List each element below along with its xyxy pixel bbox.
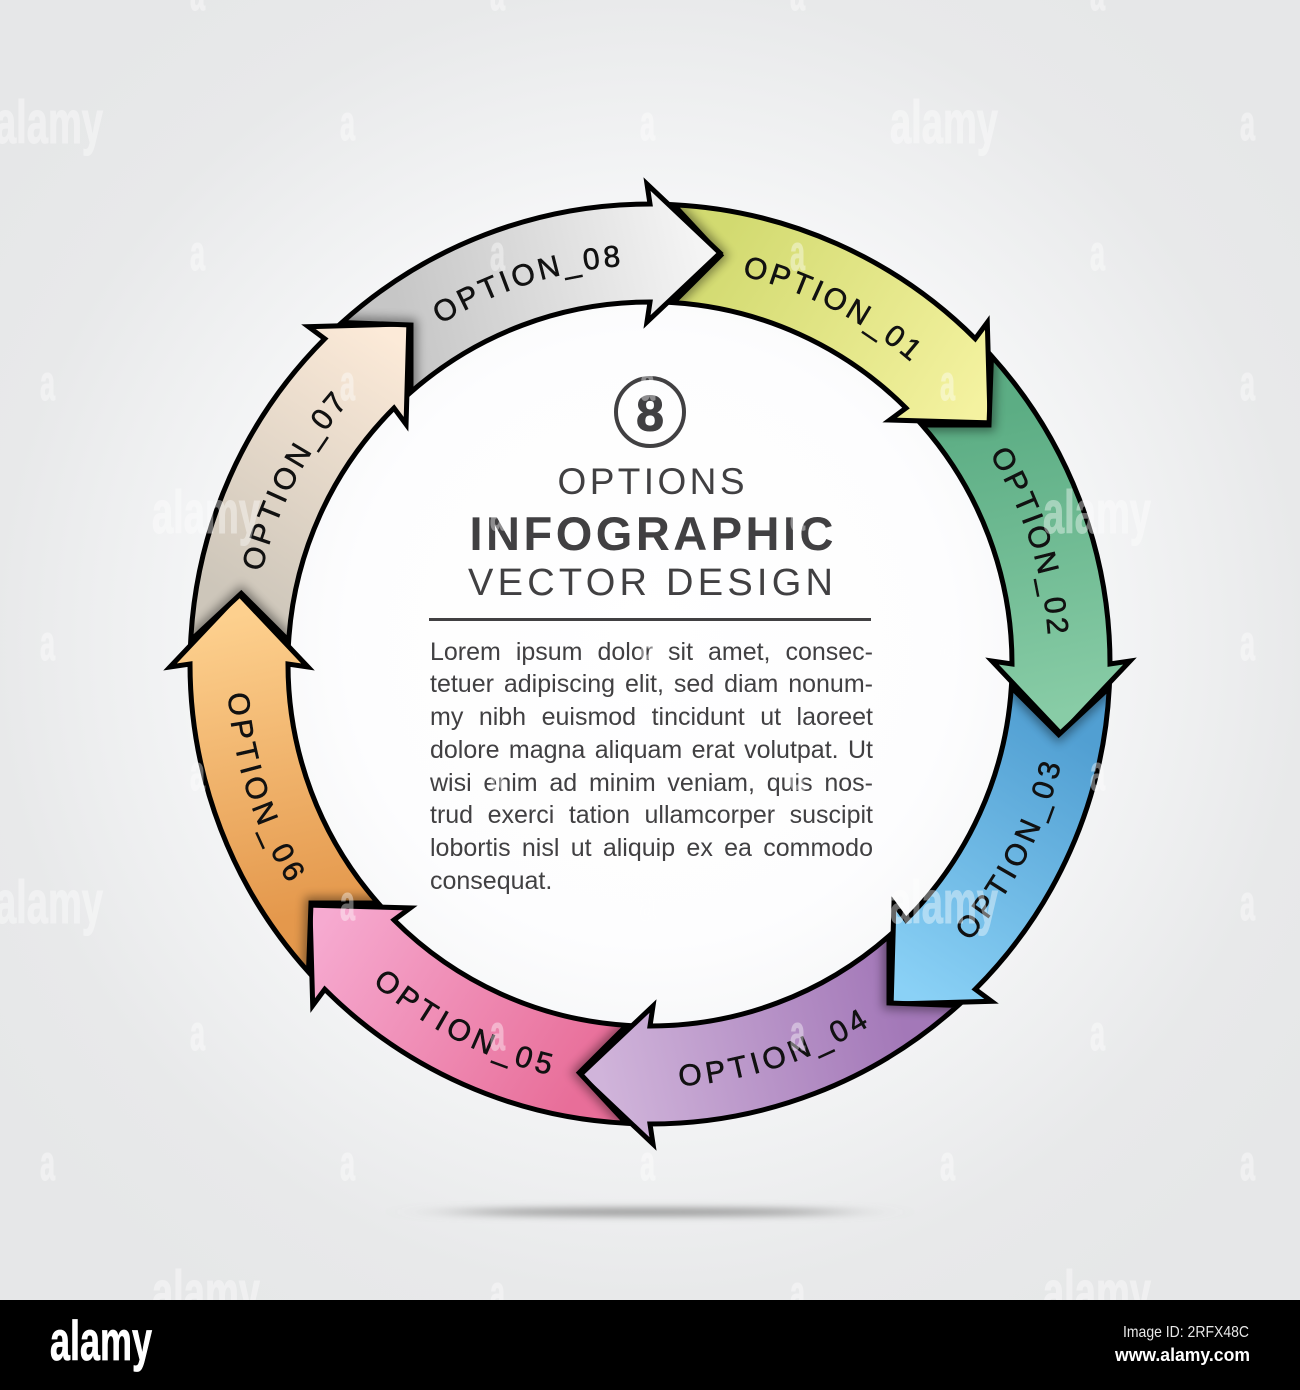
watermark overlay: a [1090,745,1106,801]
watermark overlay: a [640,1135,656,1191]
label: option 01: OPTION_01 [745,258,920,362]
watermark overlay: a [40,615,56,671]
body paragraph: my nibh euismod tincidunt ut laoreet [430,703,873,731]
watermark overlay: a [490,485,506,541]
watermark overlay: a [190,745,206,801]
label: option 04: OPTION_04 [679,1009,867,1086]
watermark overlay: a [940,615,956,671]
arrow: option 05 [309,904,632,1126]
watermark overlay: a [190,1005,206,1061]
body paragraph [430,638,873,895]
label: option 07: OPTION_07 [244,390,343,569]
watermark overlay: a [340,1135,356,1191]
divider rule [429,618,871,621]
watermark overlay: a [40,355,56,411]
watermark overlay: alamy [0,89,103,156]
body paragraph: lobortis nisl ut aliquip ex ea commodo [430,834,873,862]
body paragraph: trud exerci tation ullamcorper suscipit [430,801,873,829]
body paragraph: tetuer adipiscing elit, sed diam nonum- [430,670,873,698]
heading: vector design: VECTOR DESIGN [468,562,833,604]
watermark overlay: a [640,875,656,931]
body paragraph: wisi enim ad minim veniam, quis nos- [430,769,873,797]
watermark overlay: a [1240,875,1256,931]
body paragraph: dolore magna aliquam erat volutpat. Ut [430,736,873,764]
watermark overlay: a [640,95,656,151]
arrow: option 07 [188,323,410,646]
watermark overlay: a [490,1005,506,1061]
label: option 03: OPTION_03 [958,762,1060,938]
label: option 02: OPTION_02 [993,448,1068,634]
arrow: option 04 [580,936,958,1144]
watermark overlay: a [1240,95,1256,151]
watermark overlay: a [1090,225,1106,281]
watermark overlay: a [1240,1135,1256,1191]
label: option 06: OPTION_06 [228,694,304,880]
watermark overlay: a [40,1135,56,1191]
arrow: option 06 [170,594,378,972]
watermark overlay: a [190,225,206,281]
watermark overlay: alamy [890,89,998,156]
watermark overlay: a [640,355,656,411]
arrow: option 01 [668,202,991,424]
website: www.alamy.com [1114,1345,1250,1365]
watermark overlay: alamy [1043,479,1151,546]
watermark overlay: a [340,615,356,671]
body paragraph: Lorem ipsum dolor sit amet, consec- [430,638,873,666]
watermark overlay: a [790,225,806,281]
image id: Image ID: 2RFX48C [1123,1324,1249,1341]
watermark overlay: a [790,1005,806,1061]
watermark overlay: a [1090,1005,1106,1061]
watermark overlay: a [640,615,656,671]
label: option 05: OPTION_05 [376,972,553,1074]
footer logo: alamy [50,1309,152,1372]
arrow: option 02 [922,356,1130,734]
watermark overlay: a [790,745,806,801]
watermark overlay: a [790,485,806,541]
watermark overlay: alamy [152,479,260,546]
watermark overlay: a [490,745,506,801]
arrow: option 03 [890,682,1112,1005]
watermark overlay: a [340,95,356,151]
heading: options: OPTIONS [558,461,744,502]
watermark overlay: alamy [0,869,103,936]
watermark overlay: a [340,875,356,931]
watermark overlay: a [940,1135,956,1191]
watermark overlay: a [1240,355,1256,411]
watermark overlay: a [1240,615,1256,671]
body paragraph: consequat. [430,867,552,895]
watermark overlay: a [490,225,506,281]
watermark overlay: a [340,355,356,411]
watermark overlay: a [940,355,956,411]
watermark overlay: alamy [890,869,998,936]
label: option 08: OPTION_08 [434,246,620,321]
footer bar [0,1300,1300,1390]
arrow: option 08 [342,184,720,392]
icon: number 8 badge [616,378,684,446]
icon: number 8 badge: 8 [636,386,664,442]
arrow ring [163,177,1137,1151]
heading: infographic: INFOGRAPHIC [470,507,834,560]
